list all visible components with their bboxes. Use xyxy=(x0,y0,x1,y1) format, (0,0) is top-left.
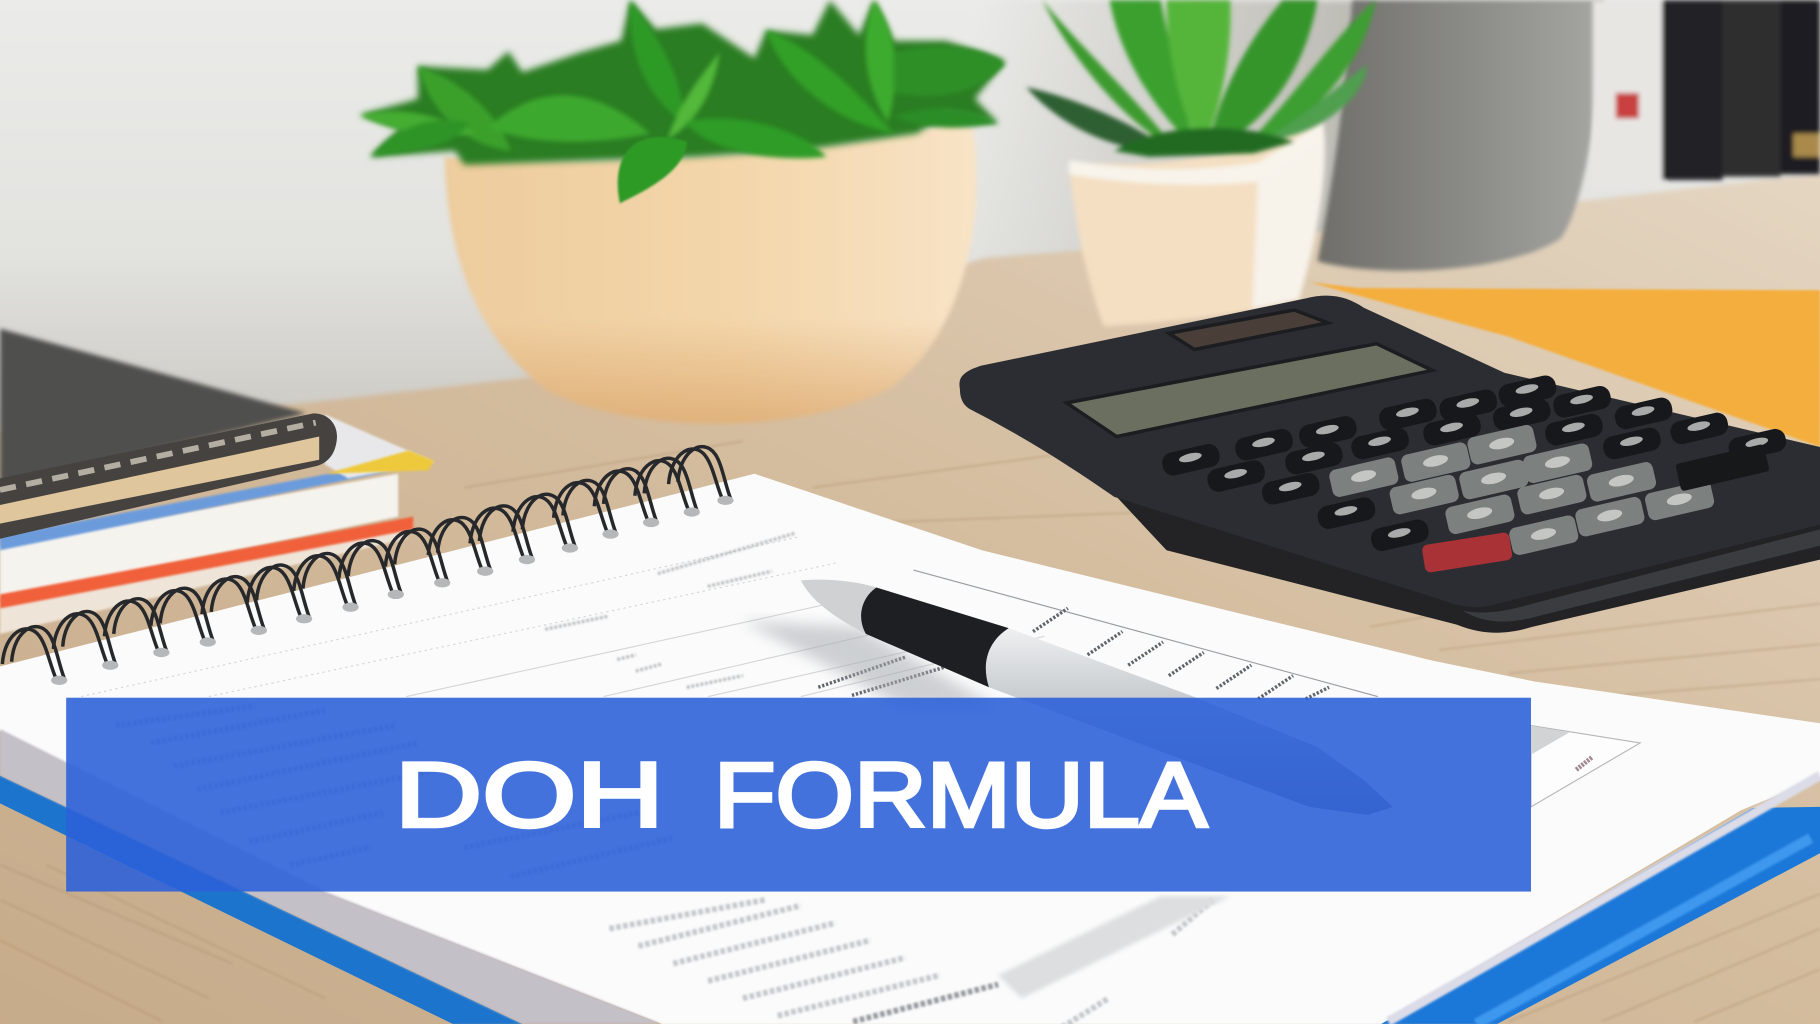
cream page band xyxy=(0,437,319,524)
small text marks xyxy=(818,608,1329,699)
right sheet edge xyxy=(1388,775,1820,1022)
title: DOH xyxy=(395,745,664,847)
calculator face xyxy=(959,296,1820,607)
gray vase xyxy=(1317,0,1604,271)
title xyxy=(395,745,1207,847)
LCD display xyxy=(1067,344,1432,437)
background shelf items xyxy=(1592,0,1820,188)
page stack edge xyxy=(0,729,662,1024)
rows seen through banner xyxy=(116,706,673,876)
pen shadow xyxy=(743,621,998,708)
lower highlight bar xyxy=(998,896,1230,998)
left folder edge xyxy=(0,775,522,1024)
blue strip xyxy=(0,470,395,550)
faint handwriting marks xyxy=(546,533,796,687)
dark leather notebook xyxy=(0,329,306,488)
right lip xyxy=(1462,529,1820,622)
calculator base xyxy=(1103,482,1820,633)
black grip xyxy=(861,587,1009,687)
plant in round pot xyxy=(360,0,1005,423)
notebook strap xyxy=(0,413,337,539)
stitching xyxy=(0,423,316,490)
wide black key xyxy=(1675,444,1770,491)
pen xyxy=(743,580,1393,815)
blurred printed table rows xyxy=(609,900,1213,1024)
orange folder xyxy=(1309,282,1820,447)
green foliage mass xyxy=(360,0,1005,165)
paper sheets xyxy=(0,474,1820,1024)
banner xyxy=(66,698,1531,892)
small red label xyxy=(1576,757,1592,770)
title: FORMULA xyxy=(714,745,1207,847)
blue folder xyxy=(0,775,1820,1024)
round peach pot xyxy=(445,123,977,423)
wood grain xyxy=(0,441,1820,1022)
page lines xyxy=(81,536,1378,697)
red key xyxy=(1421,532,1513,573)
wire spiral binding xyxy=(2,447,734,685)
green leaves xyxy=(360,0,1005,158)
side table xyxy=(1531,726,1640,807)
wall background xyxy=(0,0,1820,430)
solar panel xyxy=(1169,310,1328,350)
calculator xyxy=(959,296,1820,633)
right folder edge xyxy=(1381,807,1820,1024)
table header cell xyxy=(1531,726,1569,755)
white cover xyxy=(325,414,434,478)
pen tip xyxy=(801,580,876,634)
plant in square pot xyxy=(1026,0,1375,326)
square cream pot xyxy=(1069,122,1325,326)
pale page band xyxy=(0,522,413,634)
yellow page edge xyxy=(326,450,434,474)
silver barrel xyxy=(984,628,1393,815)
hanging front leaf xyxy=(618,137,687,203)
white book xyxy=(0,474,398,599)
green spiky leaves xyxy=(1026,0,1375,157)
orange book edge xyxy=(0,517,413,608)
left stack of notebooks xyxy=(0,329,434,634)
blue banner rectangle xyxy=(66,698,1531,892)
calculator keys xyxy=(1160,373,1788,573)
spiral notebook xyxy=(0,447,1820,1024)
folder highlight xyxy=(1476,838,1811,1024)
